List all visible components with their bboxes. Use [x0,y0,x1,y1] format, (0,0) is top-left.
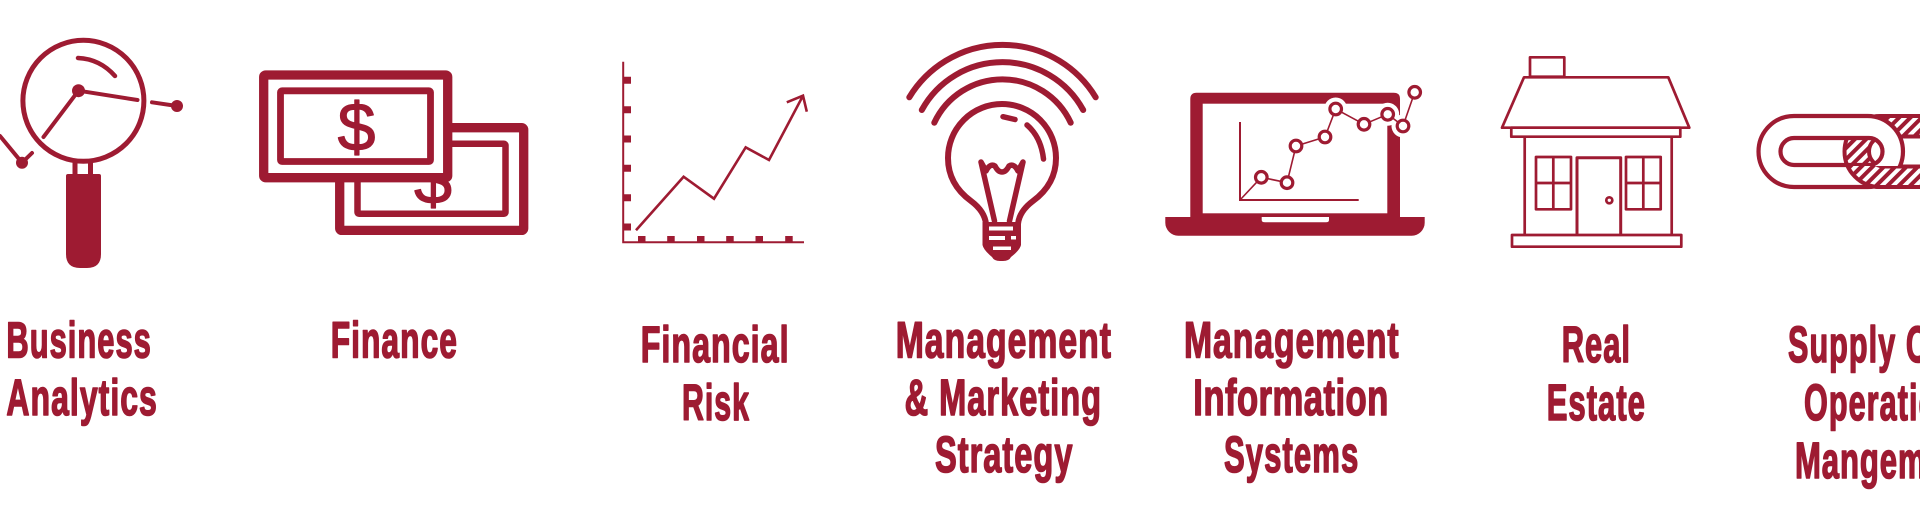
panel: Supply Chain & Operations Mangement [1759,116,1920,489]
icon: laptop with chart [1165,86,1425,236]
heading: Real Estate: Real [1562,316,1630,373]
icon: rising line chart [623,62,807,242]
heading: Management & Marketing Strategy [896,313,1111,484]
heading: Financial Risk: Financial [641,316,789,374]
heading: Management & Marketing Strategy: Management [896,313,1111,369]
panel: Finance [264,75,524,369]
icon: two dollar bills: $ [338,90,375,166]
heading: Management Information Systems: Systems [1224,426,1358,483]
panel: Business Analytics [0,40,183,427]
icon: two dollar bills: $ [414,142,452,218]
panel: Management Information Systems [1165,86,1425,483]
heading: Business Analytics: Business [6,312,151,368]
heading: Management Information Systems: Management [1184,313,1399,369]
icon: magnifying glass with line chart [0,40,183,268]
panel: Management & Marketing Strategy [896,45,1111,484]
panel: Real Estate [1502,57,1689,431]
icon: light bulb with radiating arcs [909,45,1096,261]
icon: two dollar bills [264,75,524,230]
heading: Management & Marketing Strategy: & Marketing [905,370,1101,427]
heading: Real Estate [1547,316,1645,431]
panel: Financial Risk [623,62,807,431]
heading: Business Analytics: Analytics [6,370,157,427]
heading: Supply Chain & Operations Mangement [1788,316,1920,489]
heading: Financial Risk: Risk [682,374,749,431]
heading: Management Information Systems [1184,313,1399,483]
heading: Real Estate: Estate [1547,374,1645,431]
heading: Financial Risk [641,316,789,431]
heading: Finance: Finance [331,313,457,369]
heading: Management & Marketing Strategy: Strategy [935,427,1073,484]
heading: Business Analytics [6,312,157,427]
icon: chain links [1759,116,1920,187]
icon: house [1502,57,1689,247]
heading: Management Information Systems: Information [1193,371,1388,427]
